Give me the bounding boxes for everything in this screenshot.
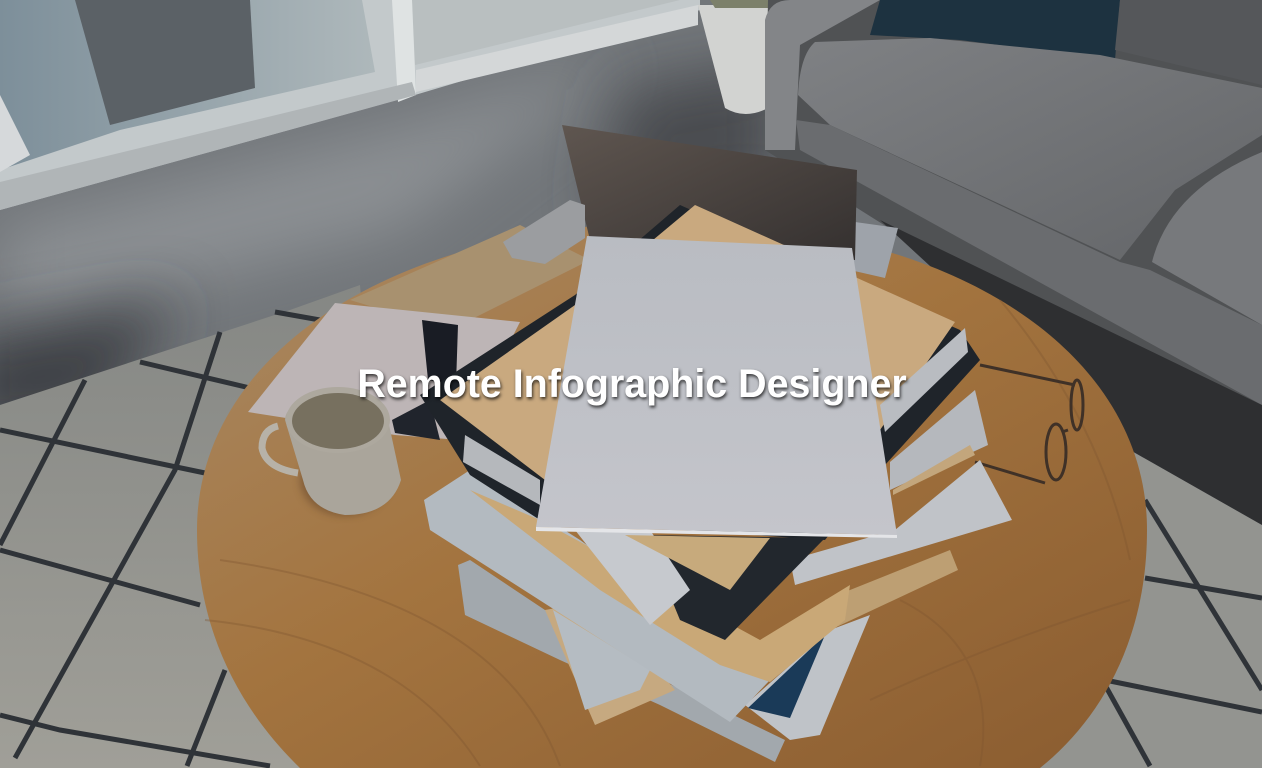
sofa — [765, 0, 1262, 525]
rug — [0, 285, 1262, 768]
plant pot — [698, 0, 768, 114]
tablet — [248, 303, 520, 440]
table — [197, 222, 1147, 768]
phone — [503, 200, 585, 264]
window — [0, 0, 700, 210]
title: Remote Infographic Designer — [357, 362, 907, 406]
coffee mug — [262, 387, 401, 516]
laptop — [562, 125, 898, 278]
glasses — [975, 365, 1083, 483]
stack of folders and binders — [420, 205, 1012, 762]
